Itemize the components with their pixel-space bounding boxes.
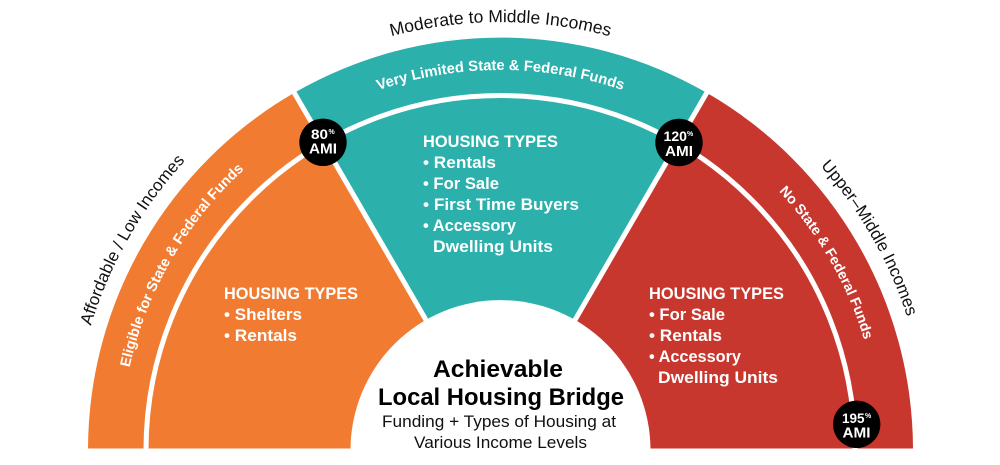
title: achievable local housing bridge: Achievable xyxy=(433,356,563,383)
arc: funding boundary xyxy=(146,96,855,450)
title: achievable local housing bridge xyxy=(378,356,624,411)
marker: 80% AMI: 80 xyxy=(311,126,328,142)
panel: red segment xyxy=(500,93,913,449)
text: teal housing types: • Rentals xyxy=(423,154,496,172)
text: red housing types: • For Sale xyxy=(649,306,725,324)
band label: no funds: No State & Federal Funds xyxy=(780,185,872,339)
marker: 195% AMI xyxy=(833,401,880,448)
marker: 120% AMI: 120 xyxy=(664,128,687,144)
label: upper-middle incomes: Upper–Middle Incomes xyxy=(823,159,915,316)
subtitle xyxy=(382,413,616,452)
text: teal housing types: • First Time Buyers xyxy=(423,196,579,214)
text: teal housing types: • Accessory xyxy=(423,217,517,235)
text: orange housing types xyxy=(224,285,358,345)
panel: teal segment xyxy=(294,38,707,448)
text: orange housing types: • Shelters xyxy=(224,306,302,324)
text: red housing types xyxy=(649,285,784,387)
band label: very limited funds: Very Limited State & Federal Funds xyxy=(375,60,624,90)
text: red housing types: HOUSING TYPES xyxy=(649,285,784,303)
marker: 120% AMI: % xyxy=(687,131,694,138)
marker: 195% AMI: AMI xyxy=(842,424,870,442)
label: affordable low incomes: Affordable / Low Incomes xyxy=(81,156,184,326)
text: red housing types: • Rentals xyxy=(649,327,722,345)
band label: eligible funds: Eligible for State & Federal Funds xyxy=(120,165,243,367)
marker: 80% AMI xyxy=(299,119,347,166)
text: orange housing types: • Rentals xyxy=(224,327,297,345)
marker: 195% AMI: 195 xyxy=(842,410,865,426)
text: teal housing types: HOUSING TYPES xyxy=(423,133,558,151)
text: red housing types: Dwelling Units xyxy=(658,369,778,387)
text: teal housing types: • For Sale xyxy=(423,175,499,193)
subtitle: Various Income Levels xyxy=(414,434,587,452)
text: teal housing types xyxy=(423,133,579,256)
center half circle xyxy=(350,300,650,450)
marker: 195% AMI: % xyxy=(865,413,872,420)
label: moderate to middle incomes: Moderate to Middle Incomes xyxy=(390,10,611,36)
text: teal housing types: Dwelling Units xyxy=(433,238,553,256)
divider: teal and red xyxy=(500,90,708,448)
divider: orange and teal xyxy=(292,90,500,448)
text: red housing types: • Accessory xyxy=(649,348,742,366)
panel: orange segment xyxy=(88,93,500,449)
title: achievable local housing bridge: Local Housing Bridge xyxy=(378,384,624,411)
text: orange housing types: HOUSING TYPES xyxy=(224,285,358,303)
marker: 80% AMI: % xyxy=(328,129,336,136)
marker: 80% AMI: AMI xyxy=(309,141,337,158)
marker: 120% AMI: AMI xyxy=(665,143,693,160)
subtitle: Funding + Types of Housing at xyxy=(382,413,616,431)
marker: 120% AMI xyxy=(655,119,703,166)
